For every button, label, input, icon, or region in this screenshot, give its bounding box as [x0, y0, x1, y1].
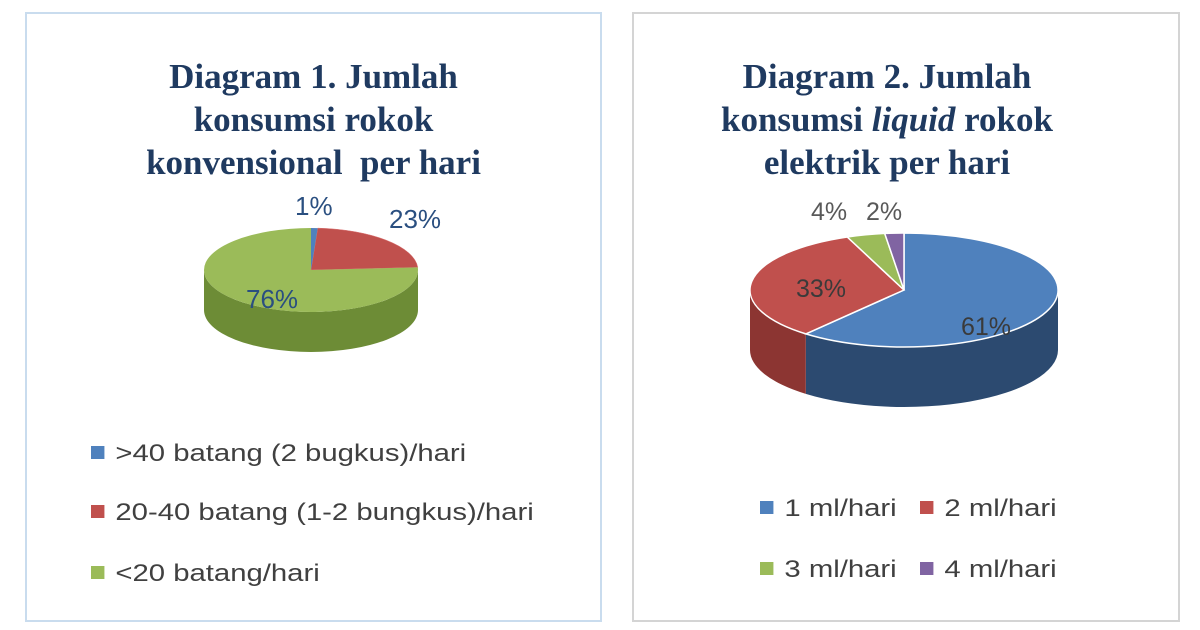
pie chart 1 — [204, 191, 441, 352]
title: diagram 1: konvensional per hari — [146, 143, 481, 182]
title: diagram 1: konsumsi rokok — [194, 100, 433, 139]
legend item 3 ml: 3 ml/hari — [784, 556, 897, 583]
pie chart 2: 61% — [961, 313, 1011, 341]
legend: diagram 2 — [760, 495, 1057, 583]
legend item 1 ml: 1 ml/hari — [784, 495, 897, 522]
legend item 4 ml: 4 ml/hari — [944, 556, 1057, 583]
pie chart 2: 2% — [866, 198, 902, 226]
pie chart 1: 23% — [389, 204, 441, 234]
title: diagram 2: konsumsi liquid rokok — [721, 100, 1053, 139]
title: diagram 2: Diagram 2. Jumlah — [743, 57, 1031, 96]
pie chart 2: 33% — [796, 275, 846, 303]
legend: diagram 1 — [91, 440, 534, 587]
legend item 20-40: 20-40 batang (1-2 bungkus)/hari — [115, 499, 534, 526]
pie chart 2 — [750, 198, 1058, 407]
pie chart 1: 76% — [246, 284, 298, 314]
title: diagram 2 — [721, 57, 1053, 182]
legend item <20: <20 batang/hari — [115, 560, 320, 587]
pie chart 2: 4% — [811, 198, 847, 226]
title: diagram 1: Diagram 1. Jumlah — [169, 57, 458, 96]
legend item >40: >40 batang (2 bugkus)/hari — [115, 440, 466, 467]
panel: diagram 2 — [632, 12, 1180, 622]
title: diagram 1 — [146, 57, 481, 182]
title: diagram 2: elektrik per hari — [764, 143, 1010, 182]
pie chart 1: 1% — [295, 191, 333, 221]
legend item 2 ml: 2 ml/hari — [944, 495, 1057, 522]
panel: diagram 1 — [25, 12, 602, 622]
